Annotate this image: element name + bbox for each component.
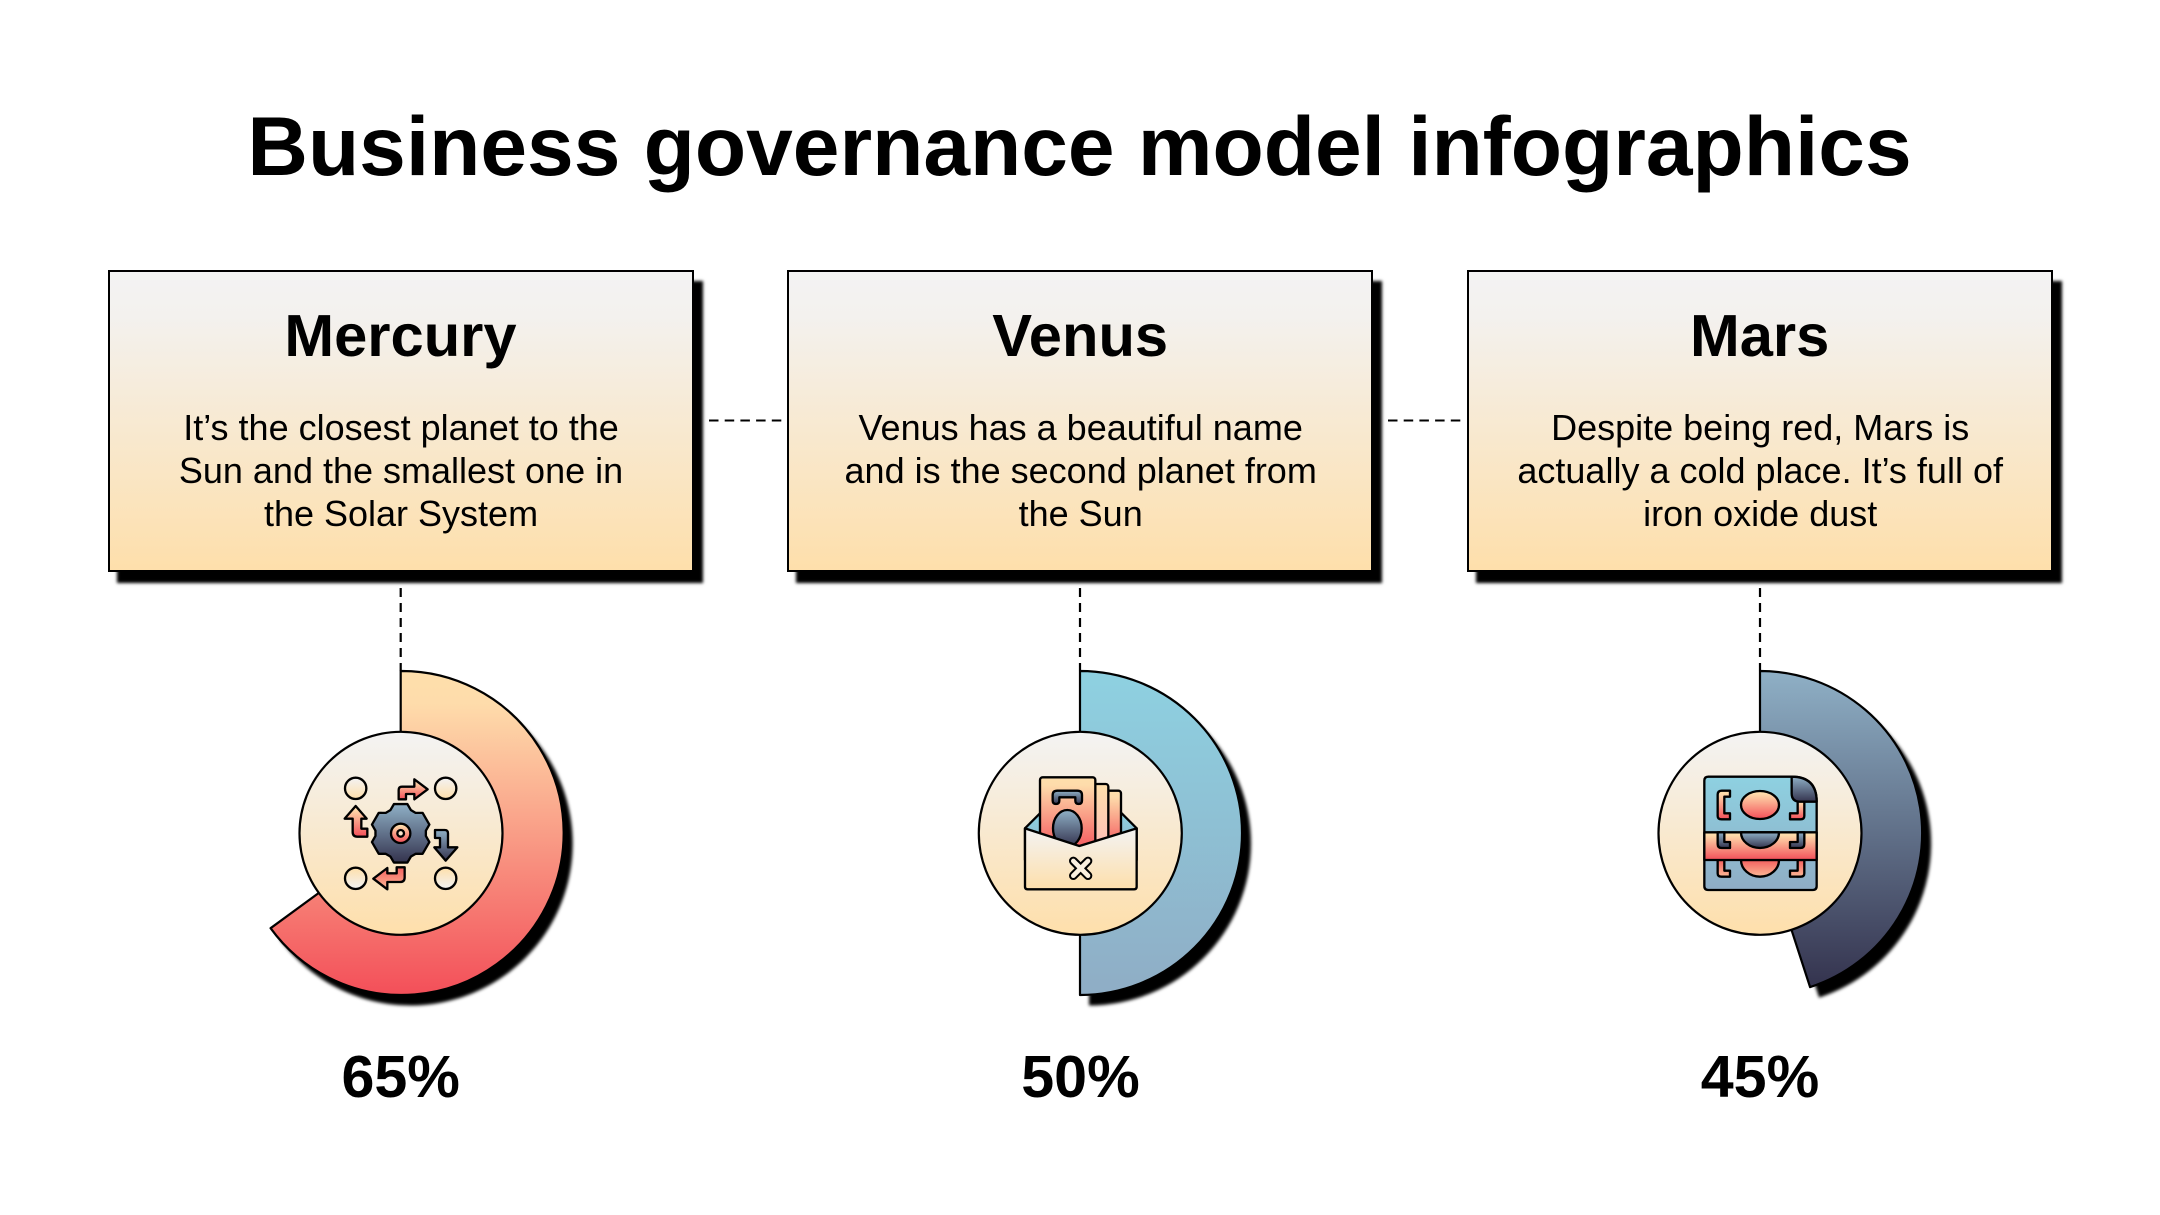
icon: gear with cycle arrows xyxy=(345,778,457,889)
text: Mercury description: Sun and the smallest one in xyxy=(179,450,623,491)
heading: Venus: Venus xyxy=(992,302,1168,369)
panel: Mercury xyxy=(108,270,694,572)
value: Mercury 65%: 65% xyxy=(341,1043,460,1110)
text: Mars description xyxy=(1517,407,2004,534)
center circle: Mercury xyxy=(300,732,502,935)
text: Venus description: Venus has a beautiful name xyxy=(859,407,1303,448)
value: Mars 45%: 45% xyxy=(1701,1043,1819,1110)
text: Mercury description: It’s the closest planet to the xyxy=(183,407,619,448)
text: Mars description: Despite being red, Mars is xyxy=(1551,407,1969,448)
heading: Mercury: Mercury xyxy=(284,302,517,369)
panel: Mars xyxy=(1467,270,2053,572)
text: Venus description: and is the second planet from xyxy=(845,450,1317,491)
donut chart: Mercury 65% xyxy=(271,671,573,1005)
connector: Venus to Mars xyxy=(1388,420,1462,422)
icon: banknote document xyxy=(1704,777,1817,890)
text: Venus description xyxy=(845,407,1317,534)
panel: Venus xyxy=(787,270,1373,572)
center circle: Mars xyxy=(1658,732,1862,935)
text: Mars description: actually a cold place. It’s full of xyxy=(1517,450,2003,491)
value: Venus 50%: 50% xyxy=(1021,1043,1140,1110)
connector: Mars card to chart xyxy=(1759,588,1761,671)
text: Mercury description: the Solar System xyxy=(264,493,538,534)
donut chart: Mars 45% xyxy=(1658,671,1931,998)
text: Venus description: the Sun xyxy=(1019,493,1143,534)
icon: envelope with cards xyxy=(1025,777,1137,889)
donut chart: Venus 50% xyxy=(979,671,1251,1006)
text: Mercury description xyxy=(179,407,623,534)
text: Mars description: iron oxide dust xyxy=(1643,493,1877,534)
connector: Venus card to chart xyxy=(1079,588,1081,671)
connector: Mercury to Venus xyxy=(709,420,782,422)
connector: Mercury card to chart xyxy=(400,588,402,671)
title: Business governance model infographics xyxy=(247,98,1912,192)
center circle: Venus xyxy=(979,732,1182,935)
heading: Mars: Mars xyxy=(1690,302,1829,369)
